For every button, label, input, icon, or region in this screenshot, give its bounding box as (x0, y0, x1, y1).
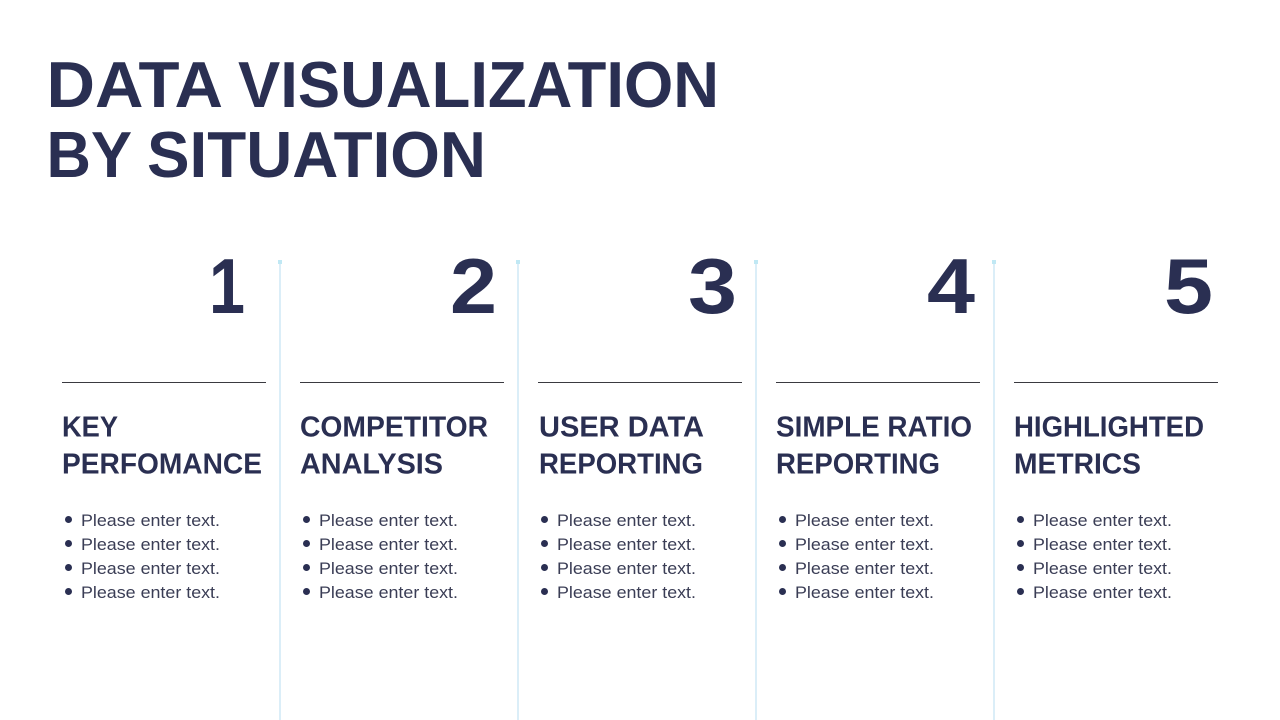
bullet list 2: Please enter text. (319, 559, 458, 578)
number 2: 2 (450, 242, 497, 330)
bullet list 3: Please enter text. (557, 535, 696, 554)
rule 1 (62, 382, 266, 383)
number 3: 3 (688, 242, 737, 330)
bullet list 5: Please enter text. (1033, 511, 1172, 530)
heading: simple ratio reporting: SIMPLE RATIO (776, 412, 972, 444)
title: VISUALIZATION (238, 48, 719, 121)
panel: user data reporting (538, 242, 742, 602)
bullet list 3: Please enter text. (557, 511, 696, 530)
bullet list 5: Please enter text. (1033, 559, 1172, 578)
bullet list 4 (779, 511, 934, 602)
column divider 1 (278, 260, 282, 720)
bullet list 1 (65, 511, 220, 602)
heading: key performance (62, 412, 262, 480)
column divider 2 (516, 260, 520, 720)
rule 5 (1014, 382, 1218, 383)
rule 3 (538, 382, 742, 383)
bullet list 4: Please enter text. (795, 535, 934, 554)
panel: key performance (62, 242, 266, 602)
heading: key performance: PERFOMANCE (62, 448, 262, 480)
bullet list 2: Please enter text. (319, 511, 458, 530)
rule 2 (300, 382, 504, 383)
heading: key performance: KEY (62, 412, 118, 444)
bullet list 4: Please enter text. (795, 583, 934, 602)
number 1: 1 (209, 242, 245, 330)
panel: highlighted metrics (1014, 242, 1218, 602)
bullet list 1: Please enter text. (81, 583, 220, 602)
rule 4 (776, 382, 980, 383)
heading: highlighted metrics (1014, 412, 1204, 480)
bullet list 2: Please enter text. (319, 583, 458, 602)
bullet list 3: Please enter text. (557, 559, 696, 578)
heading: user data reporting: USER DATA (539, 412, 704, 444)
title: SITUATION (147, 118, 486, 191)
column divider 3 (754, 260, 758, 720)
heading: user data reporting (539, 412, 704, 480)
heading: competitor analysis (300, 412, 488, 480)
title: DATA (46, 48, 223, 121)
bullet list 1: Please enter text. (81, 559, 220, 578)
bullet list 5: Please enter text. (1033, 535, 1172, 554)
panel: simple ratio reporting (776, 242, 980, 602)
heading: competitor analysis: COMPETITOR (300, 412, 488, 444)
bullet list 5 (1017, 511, 1172, 602)
heading: user data reporting: REPORTING (539, 448, 703, 480)
panel: competitor analysis (300, 242, 504, 602)
bullet list 3 (541, 511, 696, 602)
column divider 4 (992, 260, 996, 720)
bullet list 5: Please enter text. (1033, 583, 1172, 602)
bullet list 1: Please enter text. (81, 511, 220, 530)
bullet list 2: Please enter text. (319, 535, 458, 554)
heading: highlighted metrics: METRICS (1014, 448, 1141, 480)
bullet list 3: Please enter text. (557, 583, 696, 602)
heading: competitor analysis: ANALYSIS (300, 448, 443, 480)
heading: simple ratio reporting (776, 412, 972, 480)
bullet list 1: Please enter text. (81, 535, 220, 554)
number 4: 4 (927, 242, 975, 330)
title (46, 48, 719, 191)
number 5: 5 (1164, 242, 1213, 330)
bullet list 4: Please enter text. (795, 511, 934, 530)
bullet list 4: Please enter text. (795, 559, 934, 578)
bullet list 2 (303, 511, 458, 602)
title: BY (46, 118, 132, 191)
heading: simple ratio reporting: REPORTING (776, 448, 940, 480)
heading: highlighted metrics: HIGHLIGHTED (1014, 412, 1204, 444)
